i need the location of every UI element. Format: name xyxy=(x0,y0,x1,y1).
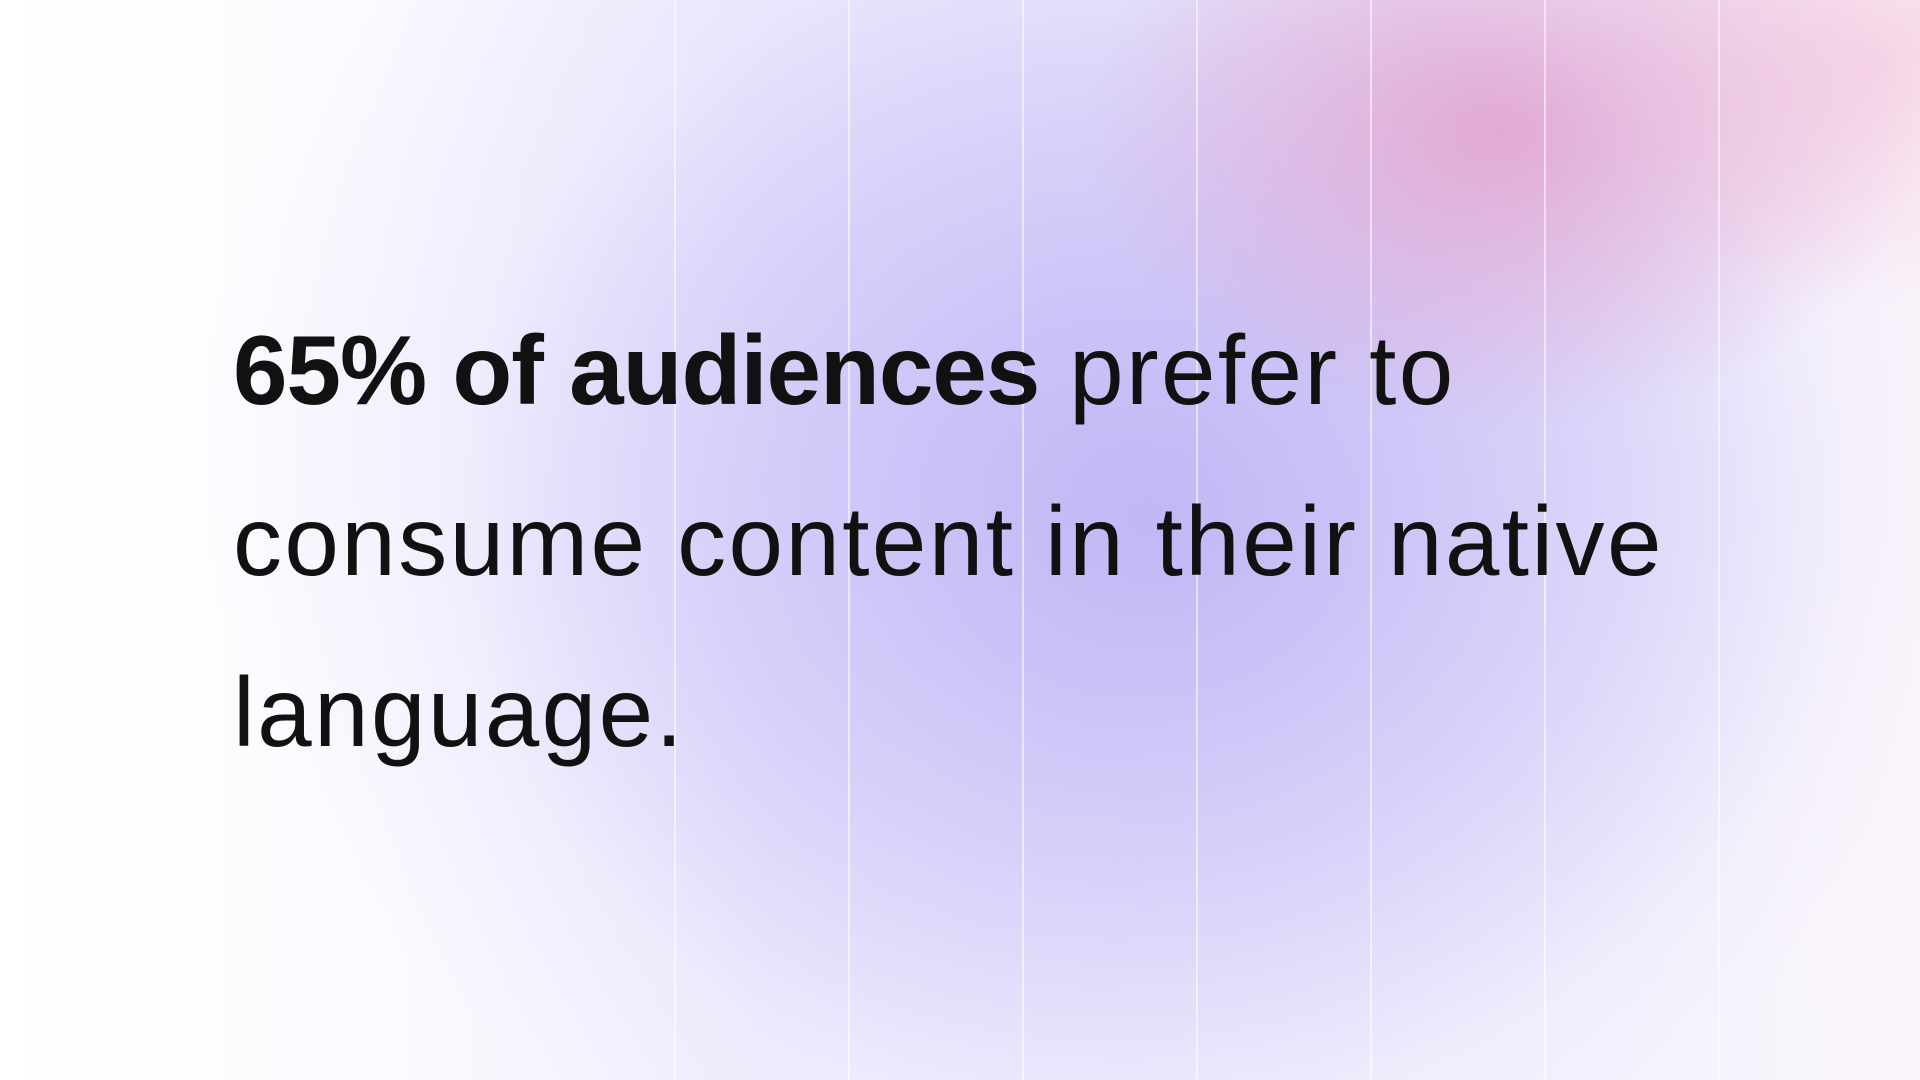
statistic text block xyxy=(233,315,1664,767)
statistic text block: 65% of audiences prefer to xyxy=(233,315,1456,425)
statistic text block: language. xyxy=(233,657,685,767)
statistic text block: consume content in their native xyxy=(233,486,1664,596)
